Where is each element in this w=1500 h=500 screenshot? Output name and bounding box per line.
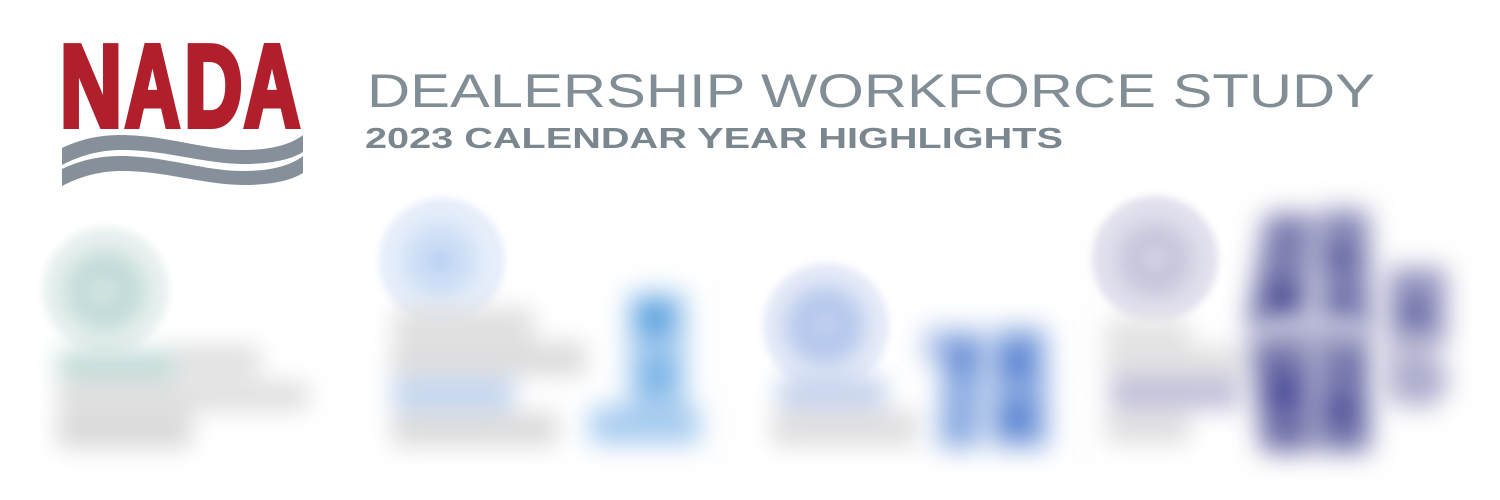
panel: third statistic (blue, blurred) xyxy=(763,263,1048,448)
panel: second statistic (light blue, blurred) xyxy=(379,198,700,446)
blurred text block xyxy=(58,346,308,448)
subtitle: 2023 CALENDAR YEAR HIGHLIGHTS xyxy=(365,123,1063,155)
NADA logo xyxy=(60,21,303,186)
logo upper wave xyxy=(62,135,303,165)
blurred text block xyxy=(772,376,918,446)
logo lower wave xyxy=(62,156,303,186)
icon: blue circle xyxy=(763,263,889,389)
blurred large number xyxy=(590,292,700,444)
icon: light blue circle xyxy=(379,198,505,324)
logo wordmark: final A: A xyxy=(244,21,300,151)
title: DEALERSHIP WORKFORCE STUDY xyxy=(367,64,1375,117)
blurred large number: bottom digit row xyxy=(1250,320,1372,452)
blurred text block xyxy=(392,308,586,446)
logo wordmark: A: A xyxy=(125,21,180,151)
panel: first statistic (teal, blurred) xyxy=(43,227,308,448)
logo wordmark: N: N xyxy=(60,21,122,151)
panel: fourth statistic (navy, blurred) xyxy=(1092,196,1448,452)
blurred large number: top digit row xyxy=(1246,210,1374,330)
blurred percent sign xyxy=(1382,268,1448,408)
blurred text block xyxy=(1106,318,1246,444)
logo wordmark: D: D xyxy=(184,21,242,151)
blurred large number xyxy=(924,328,1048,448)
icon: teal circle xyxy=(43,227,169,353)
icon: navy circle xyxy=(1092,196,1218,322)
